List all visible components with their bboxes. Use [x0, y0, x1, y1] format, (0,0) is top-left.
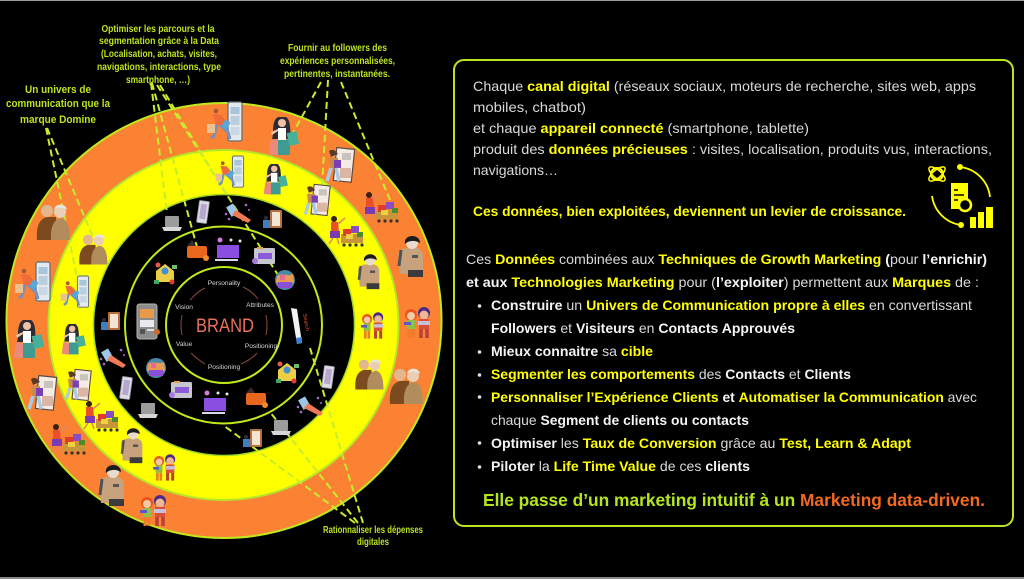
icon: woman with tablet, left [29, 376, 57, 410]
callout: rationaliser: digitales [357, 537, 389, 548]
icon: browser bottom [169, 381, 192, 398]
icon: elderly couple, right [390, 369, 423, 404]
brand attribute labels: Positioning [208, 364, 240, 371]
icon: shopper with phone, left [61, 276, 89, 307]
icon: woman with bags, left [62, 324, 86, 355]
combination text block [466, 251, 987, 290]
bullet list: Personnaliser l’Expérience Clients et Automatiser la Communication avec [491, 389, 977, 405]
intro text block: produit des données précieuses : visites, localisation, produits vus, interactions, [473, 141, 992, 157]
bullet list: Followers et Visiteurs en Contacts Approuvés [491, 320, 795, 336]
icon: woman with bags, top [269, 117, 299, 155]
callout: optimiser [97, 24, 221, 86]
icon: kiosk, bottom [243, 429, 262, 447]
icon: elderly couple, left [79, 234, 107, 264]
icon: man with backpack, right [358, 254, 379, 289]
intro text block: navigations… [473, 162, 558, 178]
brand attribute labels: Positioning [245, 343, 277, 350]
conclusion: Elle passe d’un marketing intuitif à un Marketing data-driven. [483, 490, 985, 510]
bullet list [478, 297, 977, 474]
callout: univers: marque Domine [20, 114, 96, 126]
icon: tablet, right [322, 365, 334, 389]
icon: woman with tablet, left [66, 369, 91, 401]
panel: data explanation [454, 60, 1013, 526]
icon: woman with tablet, top right [305, 184, 330, 216]
bullet list: chaque Segment de clients ou contacts [491, 412, 749, 428]
brand wheel [175, 280, 277, 371]
icon: tablet, left [120, 376, 132, 400]
icon: tablet, top [197, 200, 209, 224]
brand wheel arcs [181, 287, 267, 364]
icon: shopper with phone, left [15, 262, 50, 301]
icon: woman with bags, top [264, 164, 288, 195]
bullet list: Piloter la Life Time Value de ces clients [491, 458, 750, 474]
callout: rationaliser [323, 525, 423, 548]
icons: yellow ring [61, 156, 383, 481]
combination text block: Ces Données combinées aux Techniques de Growth Marketing (pour l’enrichir) [466, 251, 987, 267]
intro text block [473, 78, 992, 178]
icon: kids, bottom [153, 454, 175, 481]
brand attribute labels: Vision [175, 304, 193, 311]
icon: search bar [291, 308, 310, 344]
callout: univers: Un univers de [25, 84, 91, 96]
icon: web left [146, 358, 166, 378]
icon: envelope right [276, 362, 299, 384]
brand attribute labels [175, 280, 277, 371]
ring: inner outline [166, 267, 282, 383]
icon: woman with tablet, top right [327, 148, 355, 182]
ring: outer orange [6, 103, 442, 538]
callout: univers: communication que la [6, 98, 111, 110]
icon: man with backpack, bottom [121, 428, 142, 463]
callout: optimiser: smartphone, …) [126, 75, 190, 86]
icon: hand with phone, left [100, 348, 126, 368]
callout: optimiser: Optimiser les parcours et la [102, 24, 215, 35]
icon: hand with phone, top [225, 203, 251, 223]
callout: fournir: Fournir au followers des [288, 43, 387, 54]
brand attribute labels: Attributes [246, 302, 275, 309]
icon: elderly couple, right [355, 359, 383, 389]
icon: woman with bags, left [14, 320, 44, 358]
callout: rationaliser: Rationnaliser les dépenses [323, 525, 423, 536]
icon: laptop, bottom [138, 403, 158, 418]
icon: man with backpack, bottom [99, 465, 124, 506]
callout: fournir: expériences personnalisées, [280, 56, 395, 67]
intro text block: et chaque appareil connecté (smartphone, tablette) [473, 120, 809, 136]
icon: laptop, top [162, 216, 182, 231]
callout: fournir: pertinentes, instantanées. [284, 69, 390, 80]
callout: optimiser: (Localisation, achats, visites, [101, 49, 217, 60]
bullet list: Mieux connaitre sa cible [491, 343, 653, 359]
icon: laptop, bottom right [271, 420, 291, 435]
icon: kiosk, top [263, 210, 282, 228]
brand attribute labels: Value [176, 341, 193, 348]
icon: kids, right [361, 312, 383, 339]
callout: optimiser: navigations, interactions, type [97, 62, 221, 73]
icons: outer ring [14, 102, 430, 526]
icon: woman with cart, right [364, 192, 399, 223]
icons: black ring devices [100, 200, 334, 447]
connector lines [46, 80, 390, 523]
ring: yellow [48, 150, 398, 500]
ring: black data circle [94, 194, 354, 456]
ring: middle outline [125, 226, 322, 424]
callout: fournir [280, 43, 395, 80]
icon: hand with phone, right [297, 396, 323, 416]
icon: woman with cart, bottom left [51, 424, 86, 455]
icon: social media bottom [202, 390, 228, 413]
bullet list: Optimiser les Taux de Conversion grâce au Test, Learn & Adapt [491, 435, 911, 451]
callout: optimiser: segmentation grâce à la Data [99, 36, 219, 47]
bullet list: Construire un Univers de Communication propre à elles en convertissant [491, 297, 972, 313]
icon: kids, right [404, 307, 430, 338]
icon: kiosk, left [101, 312, 120, 330]
combination text block: et aux Technologies Marketing pour (l’exploiter) permettent aux Marques de : [466, 274, 979, 290]
icon: ads top [187, 240, 209, 261]
bullet list: Segmenter les comportements des Contacts et Clients [491, 366, 851, 382]
intro text block: Chaque canal digital (réseaux sociaux, moteurs de recherche, sites web, apps [473, 78, 976, 94]
icon: data cycle [927, 164, 993, 228]
concentric brand circles diagram [6, 80, 442, 538]
key message: Ces données, bien exploitées, deviennent un levier de croissance. [473, 203, 906, 219]
icon: woman with cart, bottom left [84, 401, 119, 432]
icon: envelope left [154, 262, 177, 284]
icon: social media top [215, 238, 242, 260]
icon: man with backpack, right [398, 236, 423, 277]
brand title: BRAND [196, 316, 254, 337]
icon: web top [275, 270, 295, 290]
icon: search bar: Search [301, 313, 310, 332]
panel frame [454, 60, 1013, 526]
icon: woman with cart, right [329, 216, 364, 247]
icon: shopper with phone, top [207, 102, 242, 141]
brand attribute labels: Personality [208, 280, 241, 287]
icon: ads bottom [246, 387, 268, 408]
icon: elderly couple, left [37, 205, 70, 240]
icon: shopper with phone, top [216, 156, 244, 187]
icon: phone app left [137, 304, 160, 339]
icon: browser top [252, 247, 275, 264]
icons: channels around the brand [137, 238, 310, 413]
icon: kids, bottom [140, 495, 166, 526]
callout: univers [6, 84, 111, 126]
intro text block: mobiles, chatbot) [473, 99, 586, 115]
